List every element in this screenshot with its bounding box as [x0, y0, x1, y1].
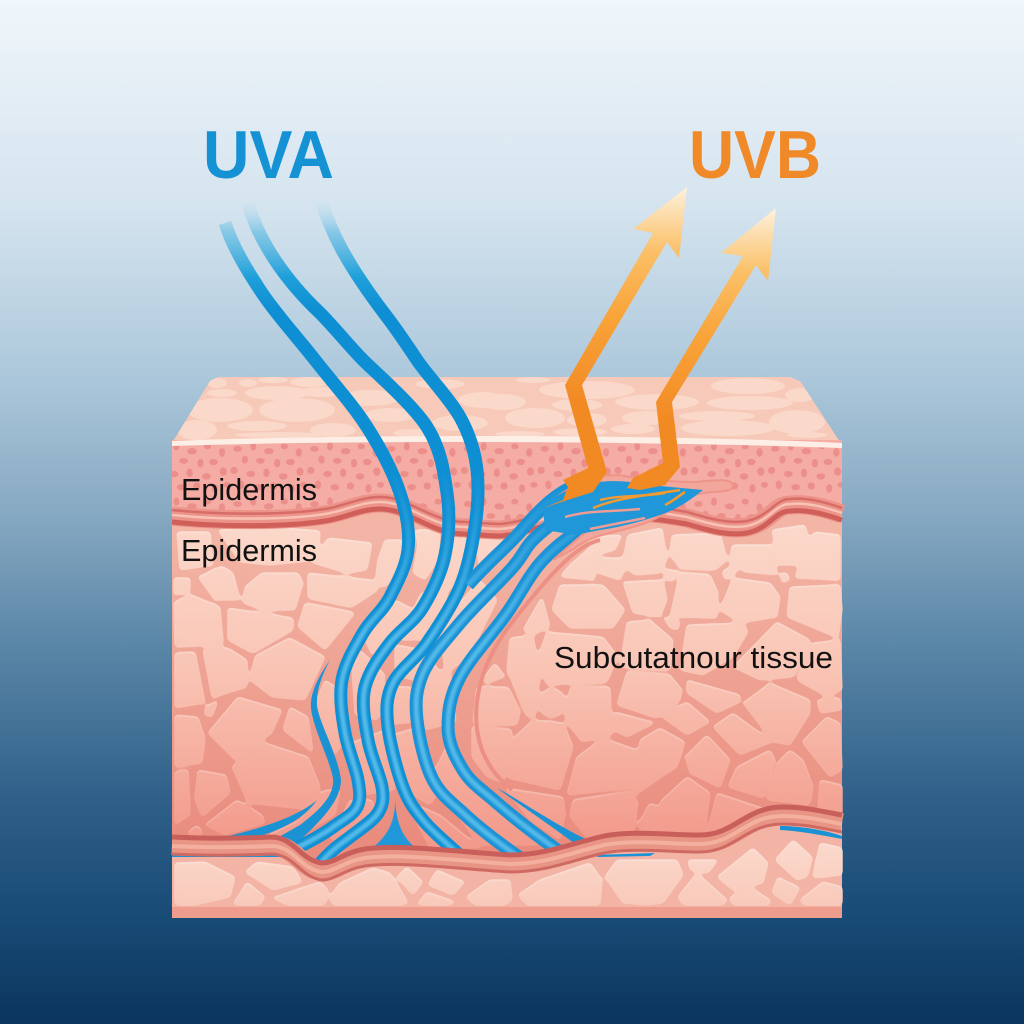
blue pool [543, 481, 703, 535]
blue triangle at base [370, 797, 418, 850]
reflected stream branches [416, 488, 640, 870]
upper membrane [172, 497, 842, 536]
UVB arrow right [627, 208, 776, 490]
UVB arrow left [543, 187, 687, 508]
thin tapered vessel left [270, 660, 341, 842]
ray streams [225, 197, 478, 868]
label: Subcutatnour tissue: Subcutatnour tissue [554, 640, 833, 675]
panel: dermis cell layer [172, 503, 842, 860]
label: UVA: UVA [203, 117, 334, 193]
panel: epidermis layer [172, 436, 842, 540]
blue strips beneath lower membrane [172, 826, 842, 857]
label: Epidermis lower: Epidermis [181, 533, 317, 568]
reaction pool where UVB and UVA meet [543, 475, 733, 560]
lower membrane [172, 807, 842, 880]
stream highlights [225, 197, 640, 870]
pink slits [565, 509, 645, 529]
panel: subcutaneous fat layer [172, 815, 842, 918]
thin tapered vessel right [497, 788, 592, 846]
label: UVB: UVB [689, 117, 821, 193]
tapered tail left [223, 800, 317, 840]
label: Epidermis upper: Epidermis [181, 472, 317, 507]
UVA rays penetrating skin [223, 197, 640, 870]
orange streaks [593, 490, 685, 508]
panel: skin surface top face [172, 377, 842, 445]
boundary curve around deep rays [476, 540, 600, 790]
pink sac [550, 475, 733, 560]
